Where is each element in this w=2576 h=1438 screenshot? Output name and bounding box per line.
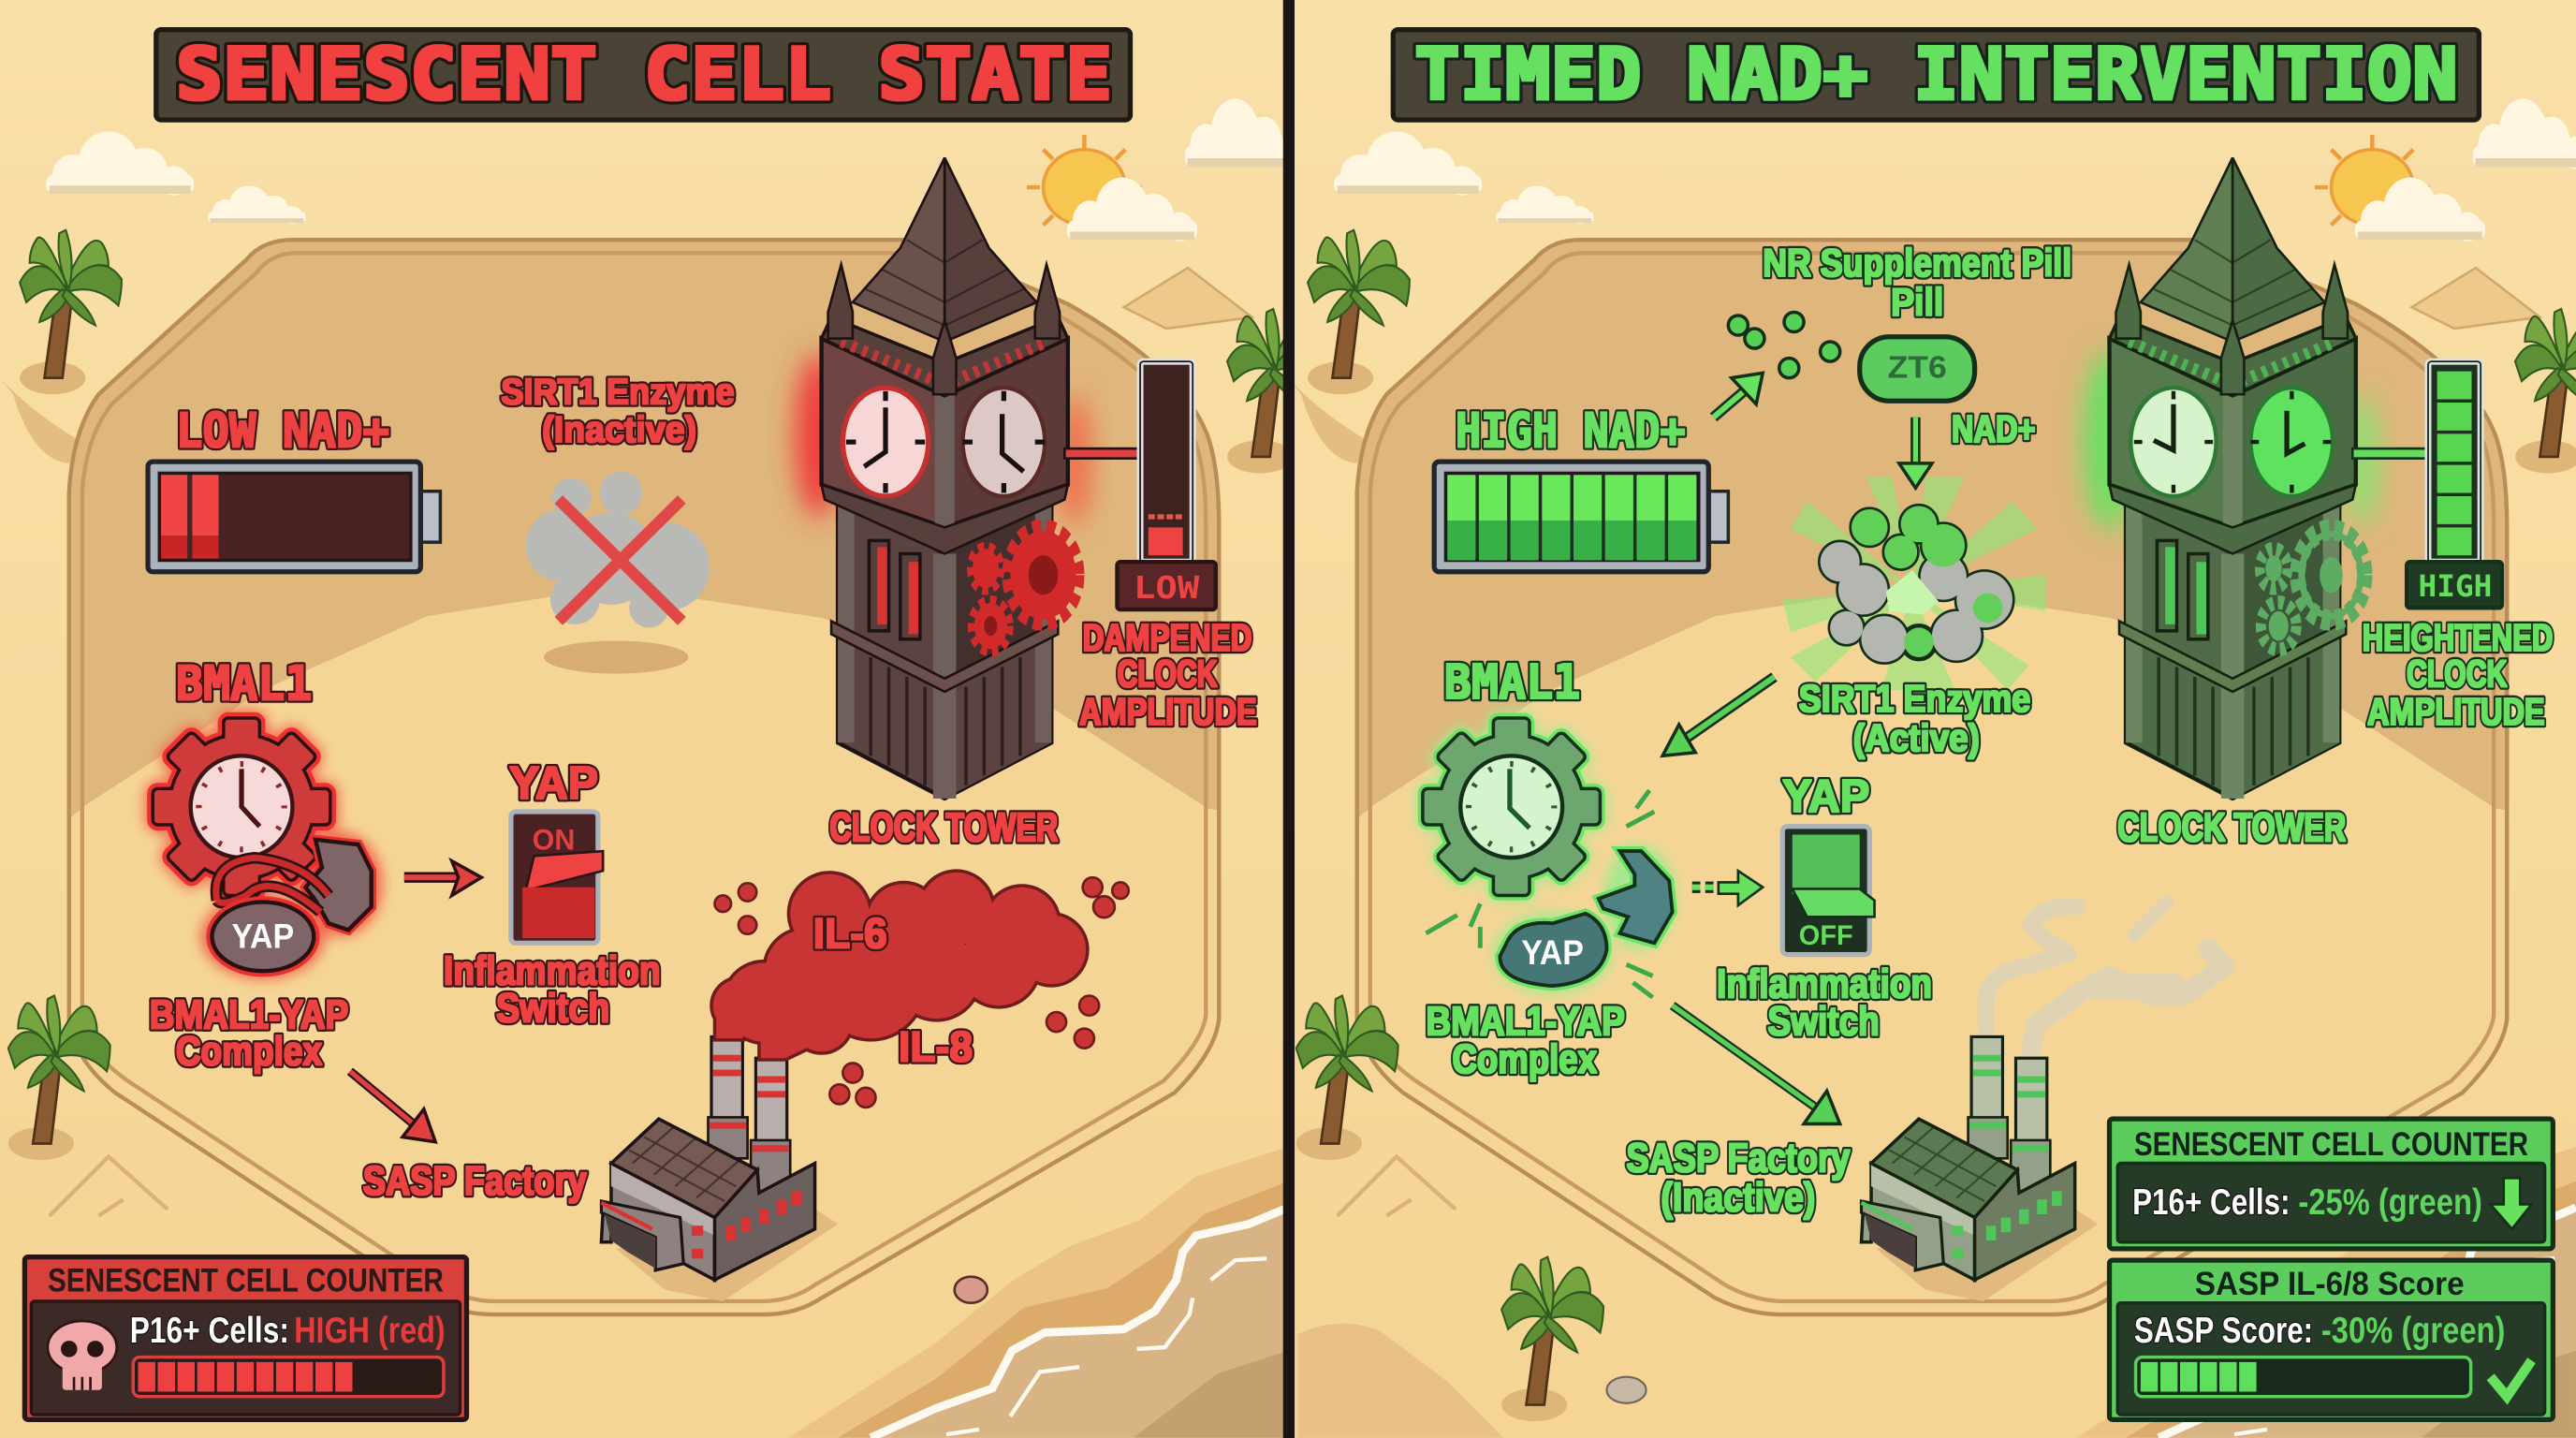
arrow: complex to factory	[1673, 1005, 1840, 1123]
BMAL1-YAP complex: YAP	[232, 917, 294, 956]
arrow: NAD+ to SIRT1: NAD+	[1952, 407, 2036, 450]
YAP inflammation switch on: YAP	[509, 758, 598, 809]
label: SASP factory: SASP Factory	[363, 1158, 587, 1204]
senescent cell counter: SENESCENT CELL COUNTER	[48, 1262, 444, 1299]
label: SASP factory inactive: SASP Factory	[1627, 1135, 1851, 1181]
senescent cell counter: P16+ Cells:	[130, 1311, 289, 1351]
BMAL1-YAP complex: BMAL1-YAP	[150, 992, 348, 1038]
SIRT1 enzyme inactive: (Inactive)	[542, 410, 696, 450]
BMAL1-YAP complex	[150, 657, 383, 1074]
SASP IL-6/8 score: SASP IL-6/8 Score	[2195, 1266, 2465, 1302]
title banner: timed NAD+ intervention: TIMED NAD+ INTERVENTION	[1414, 33, 2458, 115]
label: heightened clock amplitude	[2363, 616, 2553, 733]
glow behind clock tower	[795, 353, 1090, 526]
red cytokine smoke: IL-8	[899, 1023, 973, 1071]
glow behind clock tower	[2083, 350, 2378, 531]
BMAL1-YAP complex dissociated: YAP	[1521, 933, 1584, 972]
senescent cell counter: HIGH (red)	[294, 1311, 446, 1351]
arrow: dashed blocked to switch	[1692, 871, 1763, 905]
clock amplitude meter: high	[2352, 361, 2502, 608]
clock tower	[2110, 157, 2364, 799]
SIRT1 enzyme inactive: SIRT1 Enzyme	[501, 373, 735, 413]
label: dampened clock amplitude: AMPLITUDE	[1079, 690, 1257, 733]
icon: check mark	[2491, 1360, 2532, 1397]
clock amplitude meter: low	[1064, 361, 1216, 609]
faint smoke	[1986, 902, 2224, 1053]
YAP inflammation switch on: ON	[533, 822, 575, 856]
YAP inflammation switch on	[444, 758, 661, 1032]
low NAD+ battery: LOW NAD+	[176, 404, 389, 459]
rock	[1606, 1377, 1647, 1403]
label: dampened clock amplitude: CLOCK	[1117, 653, 1218, 696]
SIRT1 enzyme inactive	[501, 373, 735, 674]
clock amplitude meter: high: HIGH	[2418, 570, 2492, 604]
BMAL1-YAP complex dissociated: Complex	[1453, 1036, 1597, 1082]
center divider	[1283, 0, 1295, 1438]
BMAL1-YAP complex: BMAL1	[176, 657, 313, 712]
SASP IL-6/8 score: SASP Score:	[2134, 1311, 2313, 1351]
YAP inflammation switch on: Switch	[496, 986, 609, 1032]
NR supplement pill ZT6: Pill	[1891, 280, 1943, 324]
icon: down arrow	[2491, 1178, 2532, 1229]
arrow: SIRT1 to BMAL1	[1662, 677, 1774, 756]
senescent cell counter result	[2110, 1119, 2553, 1249]
YAP inflammation switch off: Inflammation	[1717, 961, 1932, 1006]
clock amplitude meter: low: LOW	[1134, 569, 1200, 606]
icon: skull	[48, 1321, 117, 1390]
SASP factory inactive	[1862, 1036, 2098, 1301]
SASP factory	[601, 1036, 838, 1301]
senescent cell counter result: -25% (green)	[2298, 1182, 2482, 1223]
BMAL1-YAP complex dissociated: BMAL1	[1444, 655, 1580, 711]
label: heightened clock amplitude: CLOCK	[2407, 653, 2507, 696]
arrow: NAD+ to SIRT1	[1899, 407, 2036, 488]
arrow: complex to switch	[404, 861, 481, 895]
panel: senescent cell state	[0, 0, 1329, 1438]
shell	[955, 1277, 988, 1303]
YAP inflammation switch off: OFF	[1799, 920, 1853, 951]
high NAD+ battery	[1434, 404, 1728, 572]
arrow: complex to factory	[350, 1071, 435, 1142]
YAP inflammation switch off	[1717, 771, 1932, 1045]
label: SASP factory inactive	[1627, 1135, 1851, 1220]
arrow: pill to NAD+	[1714, 373, 1763, 418]
label: clock tower: CLOCK TOWER	[2117, 805, 2346, 851]
YAP inflammation switch off: Switch	[1767, 999, 1880, 1045]
senescent cell counter result: P16+ Cells:	[2132, 1182, 2291, 1223]
SIRT1 enzyme active: (Active)	[1853, 716, 1980, 759]
low NAD+ battery	[148, 404, 440, 572]
SASP IL-6/8 score	[2110, 1260, 2553, 1419]
NR supplement pill ZT6: NR Supplement Pill	[1763, 241, 2071, 285]
panel: timed NAD+ intervention	[1288, 0, 2576, 1438]
red cytokine smoke: IL-6	[813, 910, 887, 958]
BMAL1-YAP complex: Complex	[176, 1028, 323, 1074]
SASP IL-6/8 score: -30% (green)	[2321, 1311, 2505, 1351]
YAP inflammation switch off: YAP	[1782, 771, 1869, 822]
BMAL1-YAP complex dissociated: BMAL1-YAP	[1426, 999, 1625, 1045]
senescent cell counter	[24, 1257, 466, 1419]
SIRT1 enzyme active	[1782, 477, 2045, 759]
YAP inflammation switch on: Inflammation	[444, 947, 661, 993]
red cytokine smoke	[713, 873, 1129, 1108]
high NAD+ battery: HIGH NAD+	[1456, 404, 1686, 459]
clock tower	[822, 157, 1076, 799]
palm near sand	[1501, 1257, 1603, 1421]
label: dampened clock amplitude	[1079, 616, 1257, 733]
label: SASP factory inactive: (Inactive)	[1661, 1174, 1815, 1220]
dunes lower left	[1298, 1324, 1503, 1438]
NR supplement pill ZT6: ZT6	[1888, 351, 1947, 386]
label: dampened clock amplitude: DAMPENED	[1083, 616, 1251, 659]
label: clock tower: CLOCK TOWER	[829, 805, 1058, 851]
NR supplement pill ZT6	[1728, 241, 2071, 401]
BMAL1-YAP complex dissociated	[1425, 655, 1676, 1082]
title banner: senescent cell state: SENESCENT CELL STATE	[176, 33, 1112, 115]
SIRT1 enzyme active: SIRT1 Enzyme	[1799, 677, 2030, 720]
